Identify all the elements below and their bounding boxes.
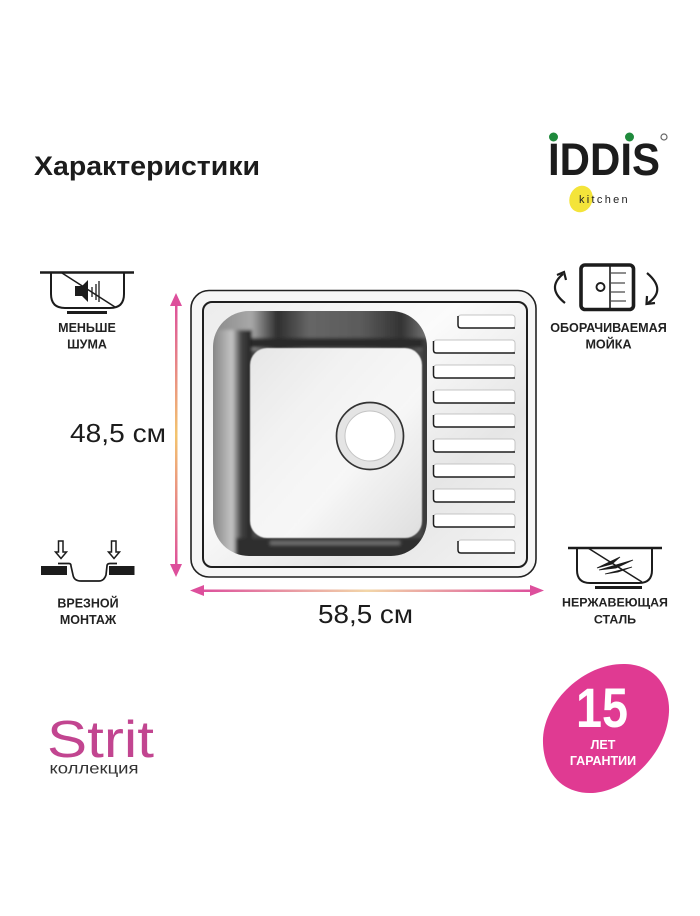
warranty badge: ГАРАНТИИ xyxy=(570,754,636,768)
slot shadows xyxy=(434,316,515,553)
bowl xyxy=(213,311,427,556)
collection name: Strit xyxy=(47,711,155,769)
drainboard slots xyxy=(434,315,515,553)
drain xyxy=(336,402,404,470)
label: flush mounting: ВРЕЗНОЙ xyxy=(57,596,119,610)
label: flush mounting: МОНТАЖ xyxy=(60,613,117,627)
title: Характеристики xyxy=(34,151,260,181)
label: stainless steel: НЕРЖАВЕЮЩАЯ xyxy=(562,596,668,610)
sink photo xyxy=(191,290,536,577)
icon: stainless steel xyxy=(568,548,662,588)
label: reversible sink: МОЙКА xyxy=(585,336,632,352)
icon: less noise xyxy=(40,272,134,312)
label: width: 58,5 см xyxy=(318,599,413,629)
label: less noise: МЕНЬШЕ xyxy=(58,321,116,335)
warranty badge: ЛЕТ xyxy=(591,738,616,752)
collection name: коллекция xyxy=(50,760,138,778)
logo: IDDIS kitchen: IDDIS xyxy=(548,134,660,185)
label: height: 48,5 см xyxy=(70,418,166,448)
logo: IDDIS kitchen xyxy=(548,132,667,216)
warranty badge xyxy=(543,664,669,793)
arrow: height dimension xyxy=(170,293,182,577)
arrow: width dimension xyxy=(190,585,544,596)
icon: reversible sink xyxy=(555,265,657,310)
label: stainless steel: СТАЛЬ xyxy=(594,612,636,626)
label: less noise: ШУМА xyxy=(67,338,107,352)
icon: flush mounting xyxy=(41,541,134,581)
warranty badge: 15 xyxy=(576,676,628,739)
label: reversible sink: ОБОРАЧИВАЕМАЯ xyxy=(550,321,667,335)
bowl floor xyxy=(250,348,422,538)
logo: IDDIS kitchen: kitchen xyxy=(579,194,630,206)
